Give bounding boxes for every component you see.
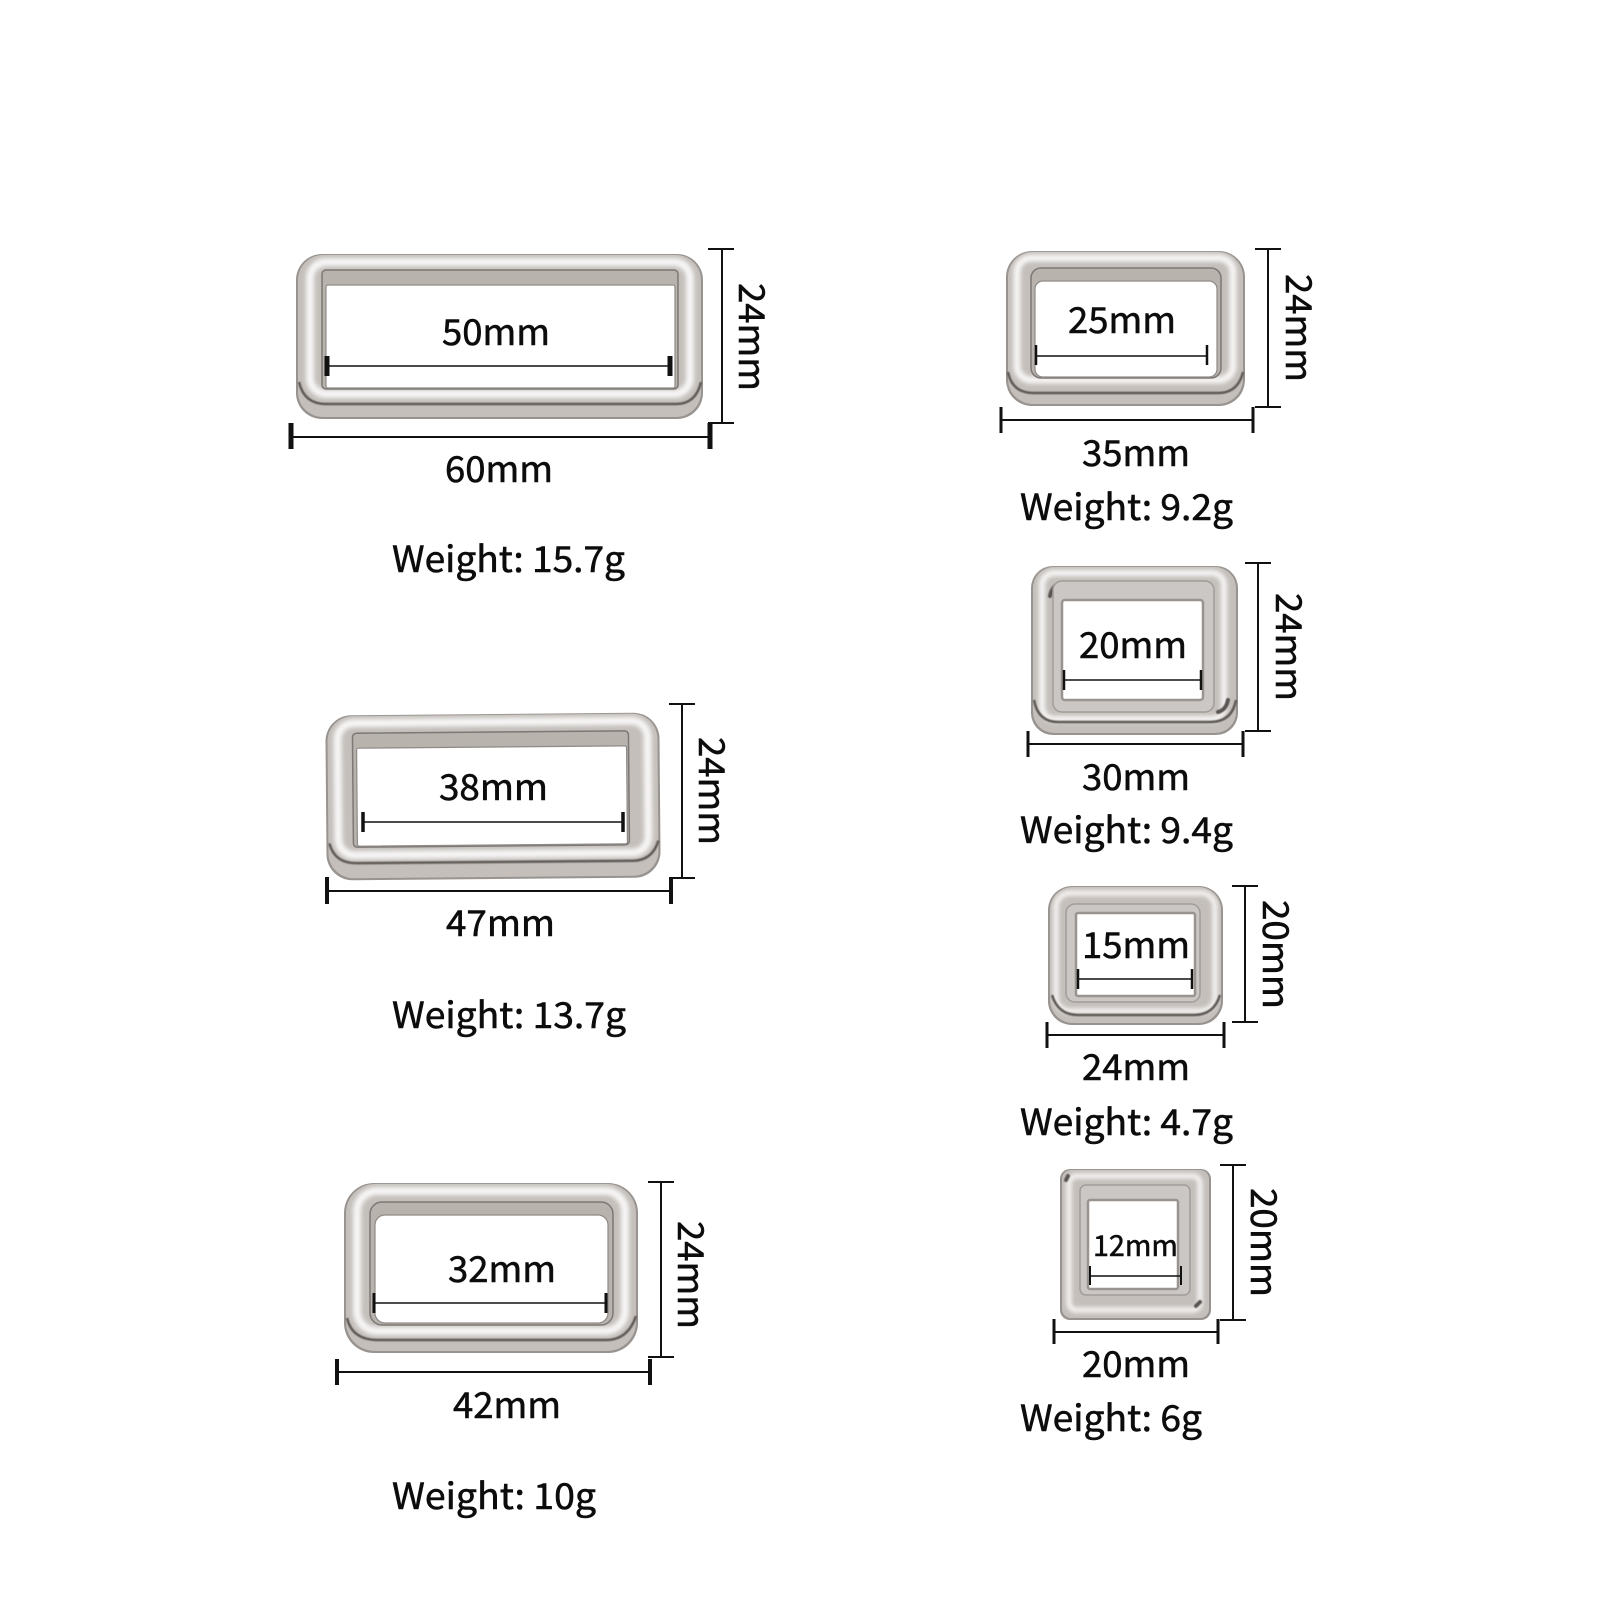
outer width dimension 20mm — [1054, 1319, 1218, 1388]
height dimension 24mm: 24mm — [1275, 274, 1327, 382]
outer width dimension 60mm: 60mm — [445, 441, 553, 493]
height dimension 24mm: 24mm — [688, 737, 740, 845]
weight label 10g: Weight: 10g — [392, 1468, 596, 1520]
height dimension 24mm: 24mm — [667, 1221, 719, 1329]
outer width dimension 30mm — [1028, 731, 1243, 801]
inner width dimension 50mm: 50mm — [442, 304, 550, 356]
panel: 24mm buckle — [1020, 886, 1304, 1146]
height dimension 24mm: 24mm — [728, 283, 780, 391]
panel: 60mm buckle — [291, 249, 780, 583]
inner width dimension 15mm: 15mm — [1082, 917, 1190, 969]
weight label 6g: Weight: 6g — [1020, 1390, 1202, 1442]
outer width dimension 47mm — [327, 877, 671, 947]
height dimension 24mm — [708, 249, 780, 423]
weight label 15.7g: Weight: 15.7g — [392, 531, 625, 583]
inner width dimension 25mm — [1036, 292, 1207, 365]
inner width dimension 32mm — [374, 1241, 606, 1313]
outer width dimension 24mm: 24mm — [1082, 1039, 1190, 1091]
height dimension 20mm: 20mm — [1252, 900, 1304, 1009]
inner width dimension 32mm: 32mm — [448, 1241, 556, 1293]
outer width dimension 42mm: 42mm — [453, 1377, 561, 1429]
height dimension 24mm — [648, 1182, 719, 1357]
inner width dimension 15mm — [1078, 917, 1192, 989]
height dimension 24mm — [1245, 563, 1317, 731]
height dimension 20mm — [1232, 886, 1304, 1022]
height dimension 20mm — [1220, 1165, 1292, 1320]
buckle ring 42mm — [344, 1183, 638, 1353]
panel: 42mm buckle — [337, 1182, 719, 1520]
panel: 30mm buckle — [1020, 563, 1317, 854]
inner width dimension 50mm — [327, 304, 670, 376]
inner width dimension 20mm — [1064, 617, 1201, 690]
panel: 47mm buckle — [325, 704, 740, 1039]
inner width dimension 12mm — [1090, 1223, 1181, 1285]
panel: 20mm buckle — [1020, 1165, 1292, 1442]
buckle ring 20mm — [1060, 1169, 1211, 1320]
height dimension 24mm — [669, 704, 740, 878]
buckle ring 35mm — [1006, 251, 1245, 406]
outer width dimension 60mm — [291, 423, 710, 493]
outer width dimension 35mm: 35mm — [1082, 425, 1190, 477]
weight label 9.2g: Weight: 9.2g — [1020, 479, 1233, 531]
weight label 13.7g: Weight: 13.7g — [392, 987, 626, 1039]
outer width dimension 24mm — [1047, 1022, 1224, 1091]
inner width dimension 25mm: 25mm — [1068, 292, 1176, 344]
outer width dimension 47mm: 47mm — [446, 895, 555, 947]
outer width dimension 20mm: 20mm — [1082, 1336, 1190, 1388]
weight label 4.7g: Weight: 4.7g — [1020, 1094, 1233, 1146]
inner width dimension 38mm: 38mm — [439, 759, 548, 811]
height dimension 20mm: 20mm — [1240, 1188, 1292, 1297]
buckle ring 47mm — [325, 713, 661, 880]
weight label 9.4g: Weight: 9.4g — [1020, 802, 1233, 854]
buckle ring 60mm — [296, 254, 703, 419]
panel: 35mm buckle — [1001, 249, 1327, 531]
outer width dimension 42mm — [337, 1359, 650, 1429]
inner width dimension 12mm: 12mm — [1093, 1223, 1178, 1265]
inner width dimension 38mm — [363, 759, 623, 832]
inner width dimension 20mm: 20mm — [1079, 617, 1187, 669]
buckle ring 24mm — [1048, 886, 1223, 1025]
outer width dimension 30mm: 30mm — [1082, 749, 1190, 801]
height dimension 24mm: 24mm — [1265, 593, 1317, 701]
outer width dimension 35mm — [1001, 407, 1253, 477]
buckle ring 30mm — [1031, 566, 1238, 735]
height dimension 24mm — [1255, 249, 1327, 407]
